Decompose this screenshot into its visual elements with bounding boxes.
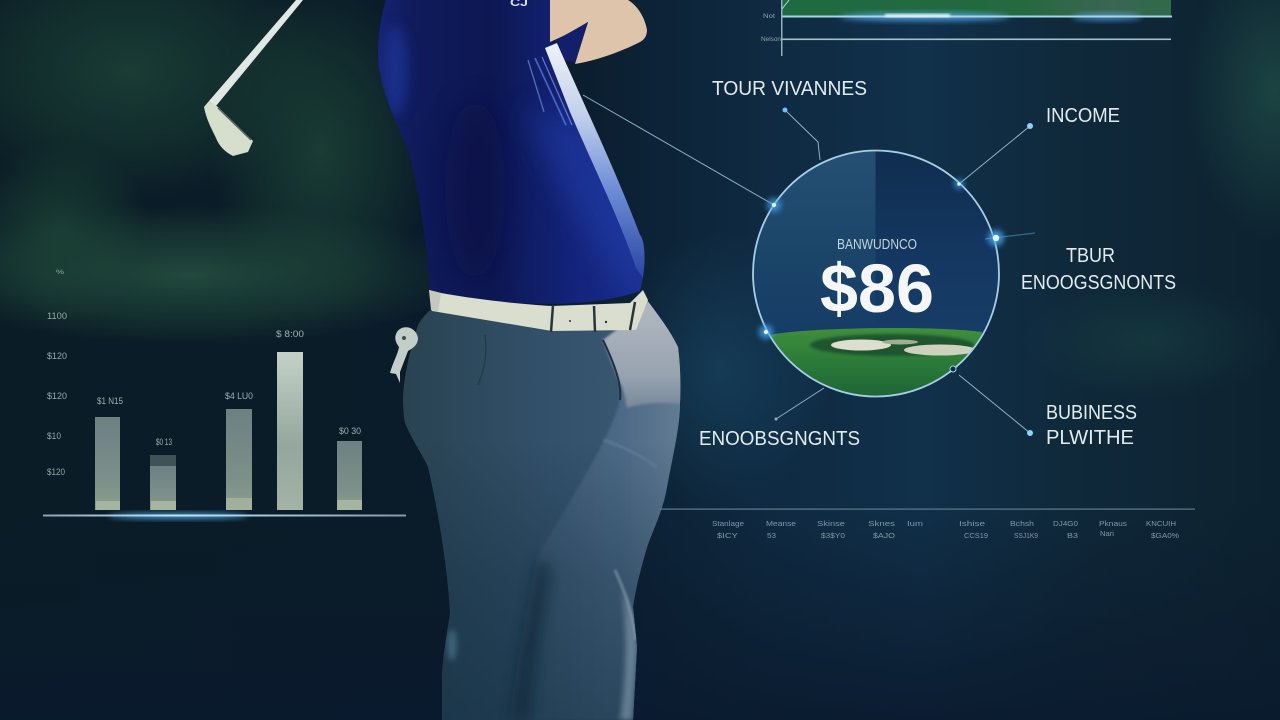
bottom axis table: SSJ1K9 [1014,531,1038,540]
y-axis labels: % [56,270,65,276]
bottom axis table: Nari [1100,529,1114,538]
label: tour winnings: TOUR VIVANNES [712,78,867,100]
label: tour endorsements: ENOOGSGNONTS [1021,272,1176,294]
bottom axis table: Meanse [766,519,796,528]
bottom axis table: CCS19 [964,531,988,540]
callout connector lines [583,95,1030,433]
pie sector highlight [758,152,876,248]
bar value labels: $0 13 [156,437,172,447]
bottom axis table: Sknes [868,519,895,528]
bar value labels [97,329,361,447]
label: endorsements: ENOOBSGNGNTS [699,428,860,450]
y-axis labels: 1100 [47,311,67,321]
bottom axis table: DJ4G0 [1053,519,1078,528]
trousers [395,295,690,720]
bottom axis table: Ishise [959,519,985,528]
bar chart [43,270,406,519]
central disc [750,108,1035,436]
glowing nodes [759,108,1035,436]
callout labels [699,78,1176,450]
sleeve [555,22,588,63]
baseline [108,513,248,519]
bottom axis table: Bchsh [1010,519,1034,528]
bar value labels: $4 LU0 [225,391,253,401]
label: business portfolio: PLWITHE [1046,427,1134,449]
disc caption: BANWUDNCO [837,236,917,253]
bottom axis table: $AJO [873,531,895,540]
bottom axis table: $GA0% [1151,531,1179,540]
bar value labels: $0 30 [339,426,361,436]
y-axis labels: $10 [47,431,61,441]
bar value labels: $1 N15 [97,396,123,406]
belt [429,290,648,331]
shirt [378,0,645,304]
lower trouser shadow [442,479,668,720]
bottom axis table: $ICY [717,531,738,540]
golf green [770,328,982,400]
bottom axis table: Ium [907,519,923,528]
right leg [541,384,680,719]
top right chart fragment: Not [763,14,775,20]
glove in pocket [390,327,418,383]
y-axis labels: $120 [47,351,67,361]
arm [550,0,647,64]
bottom axis table: $3$Y0 [821,531,845,540]
bottom axis table: B3 [1067,531,1078,540]
hip highlight [602,301,680,408]
bars [95,417,120,510]
bottom axis table: KNCUIH [1146,519,1176,528]
top right chart fragment [761,0,1172,56]
bottom axis table: Pknaus [1099,519,1127,528]
y-axis labels: $120 [47,467,65,477]
y-axis labels: $120 [47,391,67,401]
bar value labels: $ 8:00 [276,329,304,339]
bottom axis table: Stanlage [712,519,744,528]
right edge highlights [620,590,637,720]
label: tour endorsements: TBUR [1066,245,1115,267]
bottom axis table: Skinse [817,519,845,528]
y-axis labels [47,270,67,477]
bottom axis table: 53 [767,531,776,540]
top right chart fragment: Nelson [761,37,781,43]
label: business portfolio: BUBINESS [1046,402,1137,424]
fold lines [603,440,657,467]
bottom axis table [660,508,1195,540]
disc value: $86 [820,250,934,327]
golfer [370,0,690,720]
golf club [204,0,303,156]
label: income: INCOME [1046,105,1120,127]
